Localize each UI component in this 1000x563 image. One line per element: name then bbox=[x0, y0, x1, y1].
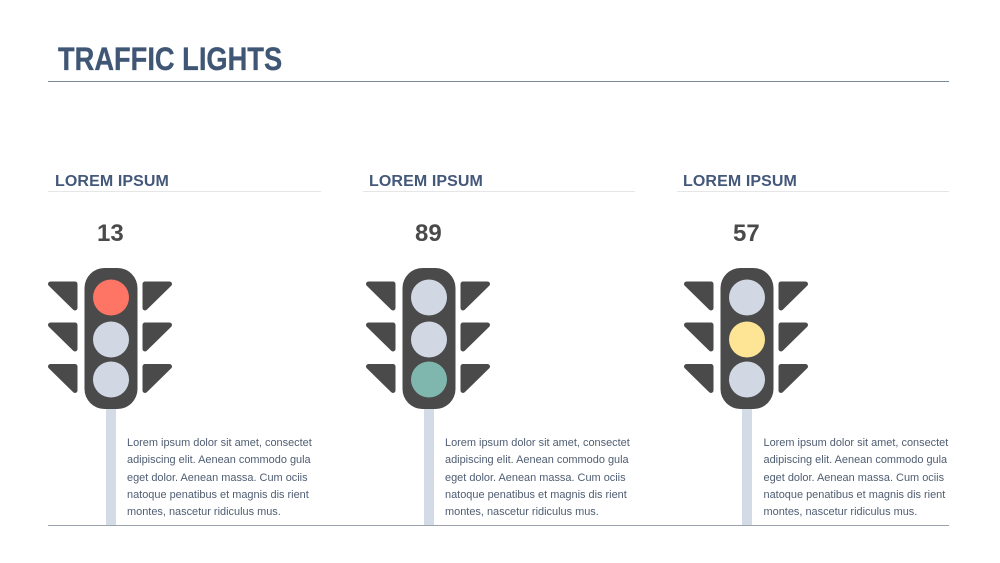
text: column 1: eget dolor. Aenean massa. Cum ociis bbox=[127, 472, 308, 484]
column 1 bbox=[48, 173, 312, 525]
text: column 1 bbox=[127, 437, 312, 518]
heading: column 2: LOREM IPSUM bbox=[369, 173, 483, 190]
number: 57: 57 bbox=[733, 220, 760, 247]
text: column 3: adipiscing elit. Aenean commodo gula bbox=[764, 454, 947, 466]
text: column 2: montes, nascetur ridiculus mus. bbox=[445, 506, 599, 518]
column 2 bbox=[366, 173, 630, 525]
column 3 bbox=[683, 173, 948, 525]
text: column 2: eget dolor. Aenean massa. Cum ociis bbox=[445, 472, 626, 484]
text: column 3 bbox=[764, 437, 948, 518]
title rule bbox=[48, 81, 949, 82]
text: column 2: adipiscing elit. Aenean commodo gula bbox=[445, 454, 629, 466]
text: column 1: montes, nascetur ridiculus mus. bbox=[127, 506, 281, 518]
text: column 3: Lorem ipsum dolor sit amet, consectet bbox=[764, 437, 948, 449]
text: column 2: Lorem ipsum dolor sit amet, consectet bbox=[445, 437, 630, 449]
text: column 3: eget dolor. Aenean massa. Cum ociis bbox=[764, 472, 944, 484]
text: column 3: montes, nascetur ridiculus mus. bbox=[764, 506, 917, 518]
heading: column 1: LOREM IPSUM bbox=[55, 173, 169, 190]
text: column 2 bbox=[445, 437, 630, 518]
number: 13: 13 bbox=[97, 220, 124, 247]
title: TRAFFIC LIGHTS bbox=[58, 41, 282, 77]
text: column 1: adipiscing elit. Aenean commodo gula bbox=[127, 454, 311, 466]
text: column 3: natoque penatibus et magnis dis rient bbox=[764, 489, 945, 501]
number: 89: 89 bbox=[415, 220, 442, 247]
heading: column 3: LOREM IPSUM bbox=[683, 173, 797, 190]
text: column 1: Lorem ipsum dolor sit amet, consectet bbox=[127, 437, 312, 449]
text: column 1: natoque penatibus et magnis dis rient bbox=[127, 489, 309, 501]
text: column 2: natoque penatibus et magnis dis rient bbox=[445, 489, 627, 501]
